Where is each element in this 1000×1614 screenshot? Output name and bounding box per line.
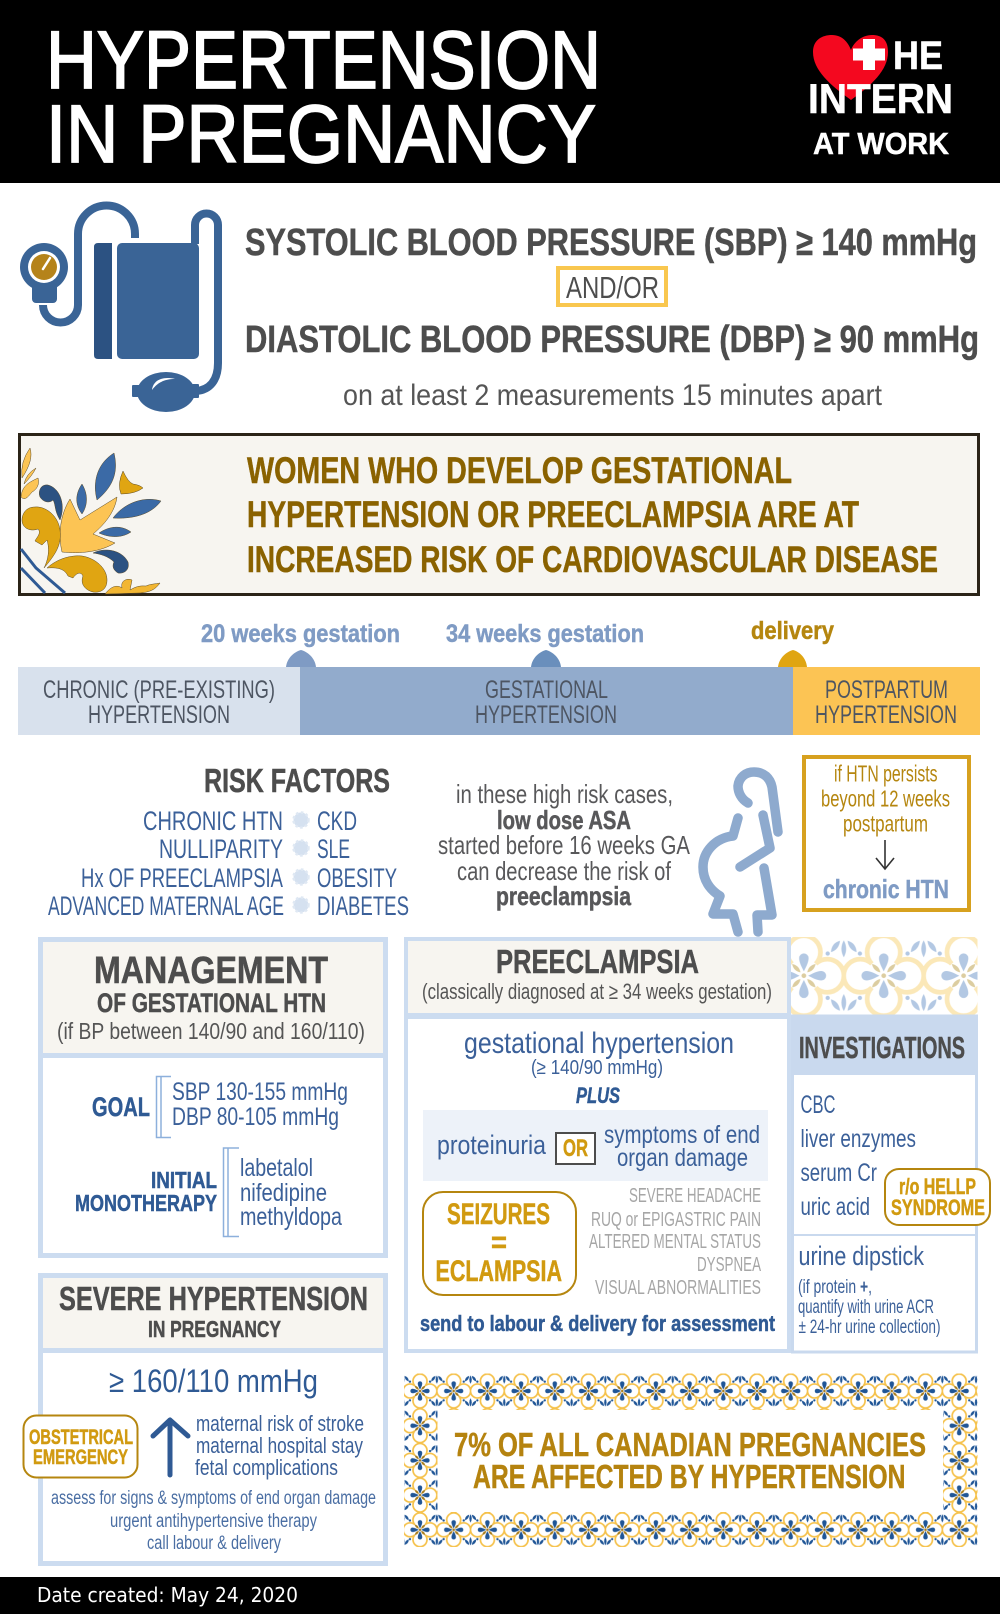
goal: SBP 130-155 mmHg [172, 1078, 348, 1106]
investigations list: liver enzymes [800, 1125, 916, 1153]
goal: GOAL [92, 1092, 150, 1122]
panel: management of gestational HTN [40, 940, 386, 1256]
goal [92, 1076, 348, 1138]
logo: The Intern at Work [808, 34, 953, 161]
logo: The Intern at Work: AT WORK [813, 126, 950, 161]
panel: chronic HTN note: beyond 12 weeks [821, 786, 950, 812]
title: IN PREGNANCY [46, 89, 596, 180]
segment: chronic hypertension [18, 667, 300, 735]
panel: cardiovascular risk callout [20, 434, 978, 594]
arrow: increased [153, 1420, 188, 1475]
urine dipstick [798, 1241, 940, 1338]
diagnostic criteria: PLUS [576, 1083, 620, 1108]
low dose ASA note: in these high risk cases, [456, 779, 673, 809]
icon: floral ornament [21, 448, 161, 594]
blood pressure criteria: on at least 2 measurements 15 minutes apart [343, 379, 883, 412]
diagnostic criteria [423, 1027, 768, 1181]
proteinuria or symptoms: organ damage [617, 1144, 748, 1172]
maternal risks: maternal hospital stay [196, 1433, 363, 1458]
callout text: WOMEN WHO DEVELOP GESTATIONAL [247, 450, 792, 491]
severe actions: call labour & delivery [147, 1533, 281, 1554]
risk factor list: DIABETES [317, 891, 409, 921]
segment: chronic hypertension: HYPERTENSION [88, 701, 230, 729]
seizures equals eclampsia badge: = [491, 1226, 507, 1259]
low dose ASA note: preeclampsia [496, 881, 631, 911]
initial monotherapy: INITIAL [151, 1167, 217, 1193]
marker: 34 weeks [446, 620, 644, 667]
arrow: down [876, 840, 894, 869]
maternal risks [195, 1411, 364, 1480]
obstetrical emergency badge [24, 1416, 138, 1478]
panel: chronic HTN note [804, 757, 969, 910]
logo: The Intern at Work: INTERN [808, 75, 953, 122]
low dose ASA note: low dose ASA [497, 805, 631, 835]
risk factor list [48, 806, 409, 921]
management heading [57, 950, 365, 1044]
callout text [247, 450, 938, 580]
risk factors: RISK FACTORS [204, 762, 390, 799]
risk factor list: Hx OF PREECLAMPSIA [81, 863, 283, 893]
marker: delivery: delivery [751, 617, 834, 645]
preeclampsia heading [422, 943, 772, 1004]
decorative tile [791, 937, 978, 1015]
header band [0, 0, 1000, 183]
logo: The Intern at Work: HE [893, 34, 943, 78]
title [46, 15, 601, 180]
investigations list: CBC [800, 1091, 836, 1119]
icon: blood pressure cuff [20, 206, 218, 412]
title: HYPERTENSION [46, 15, 601, 106]
diagnostic criteria: gestational hypertension [464, 1027, 734, 1060]
initial monotherapy: MONOTHERAPY [75, 1190, 217, 1216]
marker: 34 weeks: 34 weeks gestation [446, 620, 644, 648]
segment: postpartum hypertension: POSTPARTUM [825, 676, 948, 704]
marker: delivery [751, 617, 834, 667]
obstetrical emergency badge: OBSTETRICAL [29, 1426, 133, 1449]
risk factor list: OBESITY [317, 863, 397, 893]
severe actions: urgent antihypertensive therapy [110, 1511, 317, 1532]
end organ symptoms list: DYSPNEA [697, 1254, 761, 1276]
maternal risks: fetal complications [195, 1455, 338, 1480]
preeclampsia heading: PREECLAMPSIA [496, 943, 699, 980]
panel: severe hypertension [24, 1276, 386, 1564]
risk factor list: CHRONIC HTN [143, 806, 283, 836]
panel: chronic HTN note: chronic HTN [823, 874, 949, 904]
panel: preeclampsia [406, 939, 789, 1351]
blood pressure criteria [245, 222, 979, 412]
management heading: MANAGEMENT [94, 950, 328, 992]
low dose ASA note [438, 779, 691, 911]
preeclampsia heading: (classically diagnosed at ≥ 34 weeks gestation) [422, 979, 772, 1004]
footer [0, 1577, 1000, 1614]
obstetrical emergency badge: EMERGENCY [33, 1446, 128, 1469]
diagnostic criteria: (≥ 140/90 mmHg) [531, 1057, 663, 1079]
risk factor list: ADVANCED MATERNAL AGE [48, 891, 284, 921]
urine dipstick: ± 24-hr urine collection) [798, 1317, 940, 1338]
icon: pregnant woman [703, 772, 778, 932]
low dose ASA note: can decrease the risk of [457, 856, 672, 886]
risk factor list: CKD [317, 806, 357, 836]
risk factors [48, 762, 409, 921]
risk factor list: NULLIPARITY [159, 834, 283, 864]
severe actions: assess for signs & symptoms of end organ damage [51, 1488, 376, 1509]
proteinuria or symptoms: proteinuria [437, 1130, 547, 1160]
end organ symptoms list [589, 1185, 761, 1299]
proteinuria or symptoms [423, 1110, 768, 1181]
urine dipstick: urine dipstick [798, 1241, 924, 1271]
maternal risks: maternal risk of stroke [196, 1411, 364, 1436]
footer: Date created: May 24, 2020 [37, 1583, 298, 1607]
initial monotherapy: labetalol [240, 1154, 313, 1182]
end organ symptoms list: RUQ or EPIGASTRIC PAIN [591, 1209, 761, 1231]
HELLP badge [885, 1169, 990, 1225]
segment: gestational hypertension [300, 667, 793, 735]
severe heading: SEVERE HYPERTENSION [59, 1280, 368, 1317]
segment: gestational hypertension: HYPERTENSION [475, 701, 617, 729]
goal: DBP 80-105 mmHg [172, 1103, 339, 1131]
investigations list [800, 1091, 916, 1221]
marker: 20 weeks [201, 620, 400, 667]
urine dipstick: quantify with urine ACR [798, 1297, 934, 1318]
seizures equals eclampsia badge [423, 1192, 576, 1295]
management heading: OF GESTATIONAL HTN [97, 988, 326, 1018]
end organ symptoms list: SEVERE HEADACHE [629, 1185, 761, 1207]
severe actions [51, 1488, 376, 1554]
panel: investigations [791, 1015, 990, 1352]
management heading: (if BP between 140/90 and 160/110) [57, 1018, 365, 1044]
and/or box: AND/OR [566, 270, 659, 305]
panel: chronic HTN note: if HTN persists [834, 760, 938, 786]
proteinuria or symptoms: symptoms of end [604, 1121, 760, 1149]
panel: chronic HTN note: postpartum [843, 810, 928, 836]
marker: 20 weeks: 20 weeks gestation [201, 620, 400, 648]
segment: chronic hypertension: CHRONIC (PRE-EXISTING) [43, 676, 275, 704]
initial monotherapy: nifedipine [240, 1179, 327, 1207]
risk factor list: SLE [317, 834, 350, 864]
end organ symptoms list: VISUAL ABNORMALITIES [595, 1277, 761, 1299]
initial monotherapy: methyldopa [240, 1203, 342, 1231]
initial monotherapy [75, 1148, 342, 1236]
panel: severe hypertension: ≥ 160/110 mmHg [109, 1363, 318, 1399]
segment: gestational hypertension: GESTATIONAL [485, 676, 608, 704]
seizures equals eclampsia badge: SEIZURES [447, 1198, 550, 1231]
end organ symptoms list: ALTERED MENTAL STATUS [589, 1231, 761, 1253]
segment: postpartum hypertension [793, 667, 980, 735]
severe heading [59, 1280, 368, 1342]
proteinuria or symptoms: OR [563, 1135, 588, 1162]
prevalence text [454, 1426, 926, 1495]
timeline [18, 617, 980, 735]
investigations list: uric acid [800, 1193, 870, 1221]
investigations list: serum Cr [800, 1159, 877, 1187]
panel: prevalence banner [404, 1374, 978, 1547]
seizures equals eclampsia badge: ECLAMPSIA [436, 1255, 562, 1288]
severe heading: IN PREGNANCY [148, 1316, 281, 1342]
panel: preeclampsia: send to labour & delivery for assessment [420, 1311, 776, 1336]
low dose ASA note: started before 16 weeks GA [438, 830, 691, 860]
urine dipstick: (if protein +, [798, 1277, 872, 1298]
